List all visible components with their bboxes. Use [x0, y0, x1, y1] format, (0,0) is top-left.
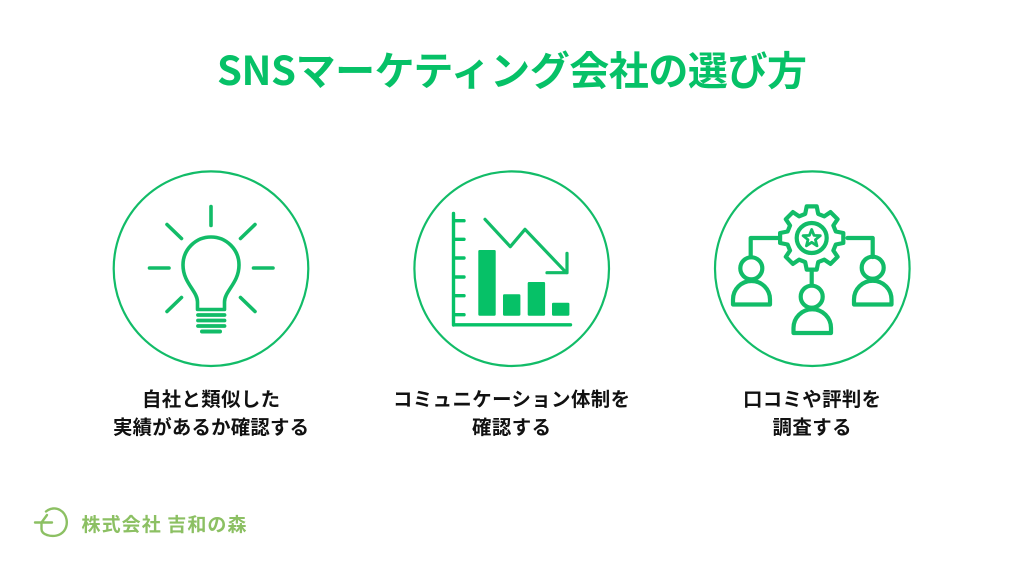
title: SNSマーケティング会社の選び方 — [217, 39, 807, 97]
label 3 — [743, 383, 881, 440]
icon: bar chart with falling arrow — [454, 214, 570, 325]
icon circle 3 — [715, 171, 910, 366]
label 1: 実績があるか確認する — [113, 411, 309, 440]
label 3: 口コミや評判を — [743, 383, 881, 412]
icon: logo mark — [35, 508, 67, 536]
label 3: 調査する — [772, 411, 852, 440]
icon circle 2 — [414, 171, 609, 366]
icon: gear with three people — [733, 206, 892, 333]
panel: similar track record — [113, 171, 309, 440]
company name: 株式会社 吉和の森 — [82, 510, 246, 537]
label 2: コミュニケーション体制を — [393, 383, 630, 412]
label 1 — [113, 383, 309, 440]
label 1: 自社と類似した — [142, 383, 280, 412]
label 2: 確認する — [472, 411, 551, 440]
panel: communication system — [393, 171, 630, 440]
icon circle 1 — [114, 171, 308, 366]
panel: reviews — [715, 171, 910, 440]
icon: light bulb — [150, 206, 273, 332]
logo — [35, 508, 246, 537]
label 2 — [393, 383, 630, 440]
